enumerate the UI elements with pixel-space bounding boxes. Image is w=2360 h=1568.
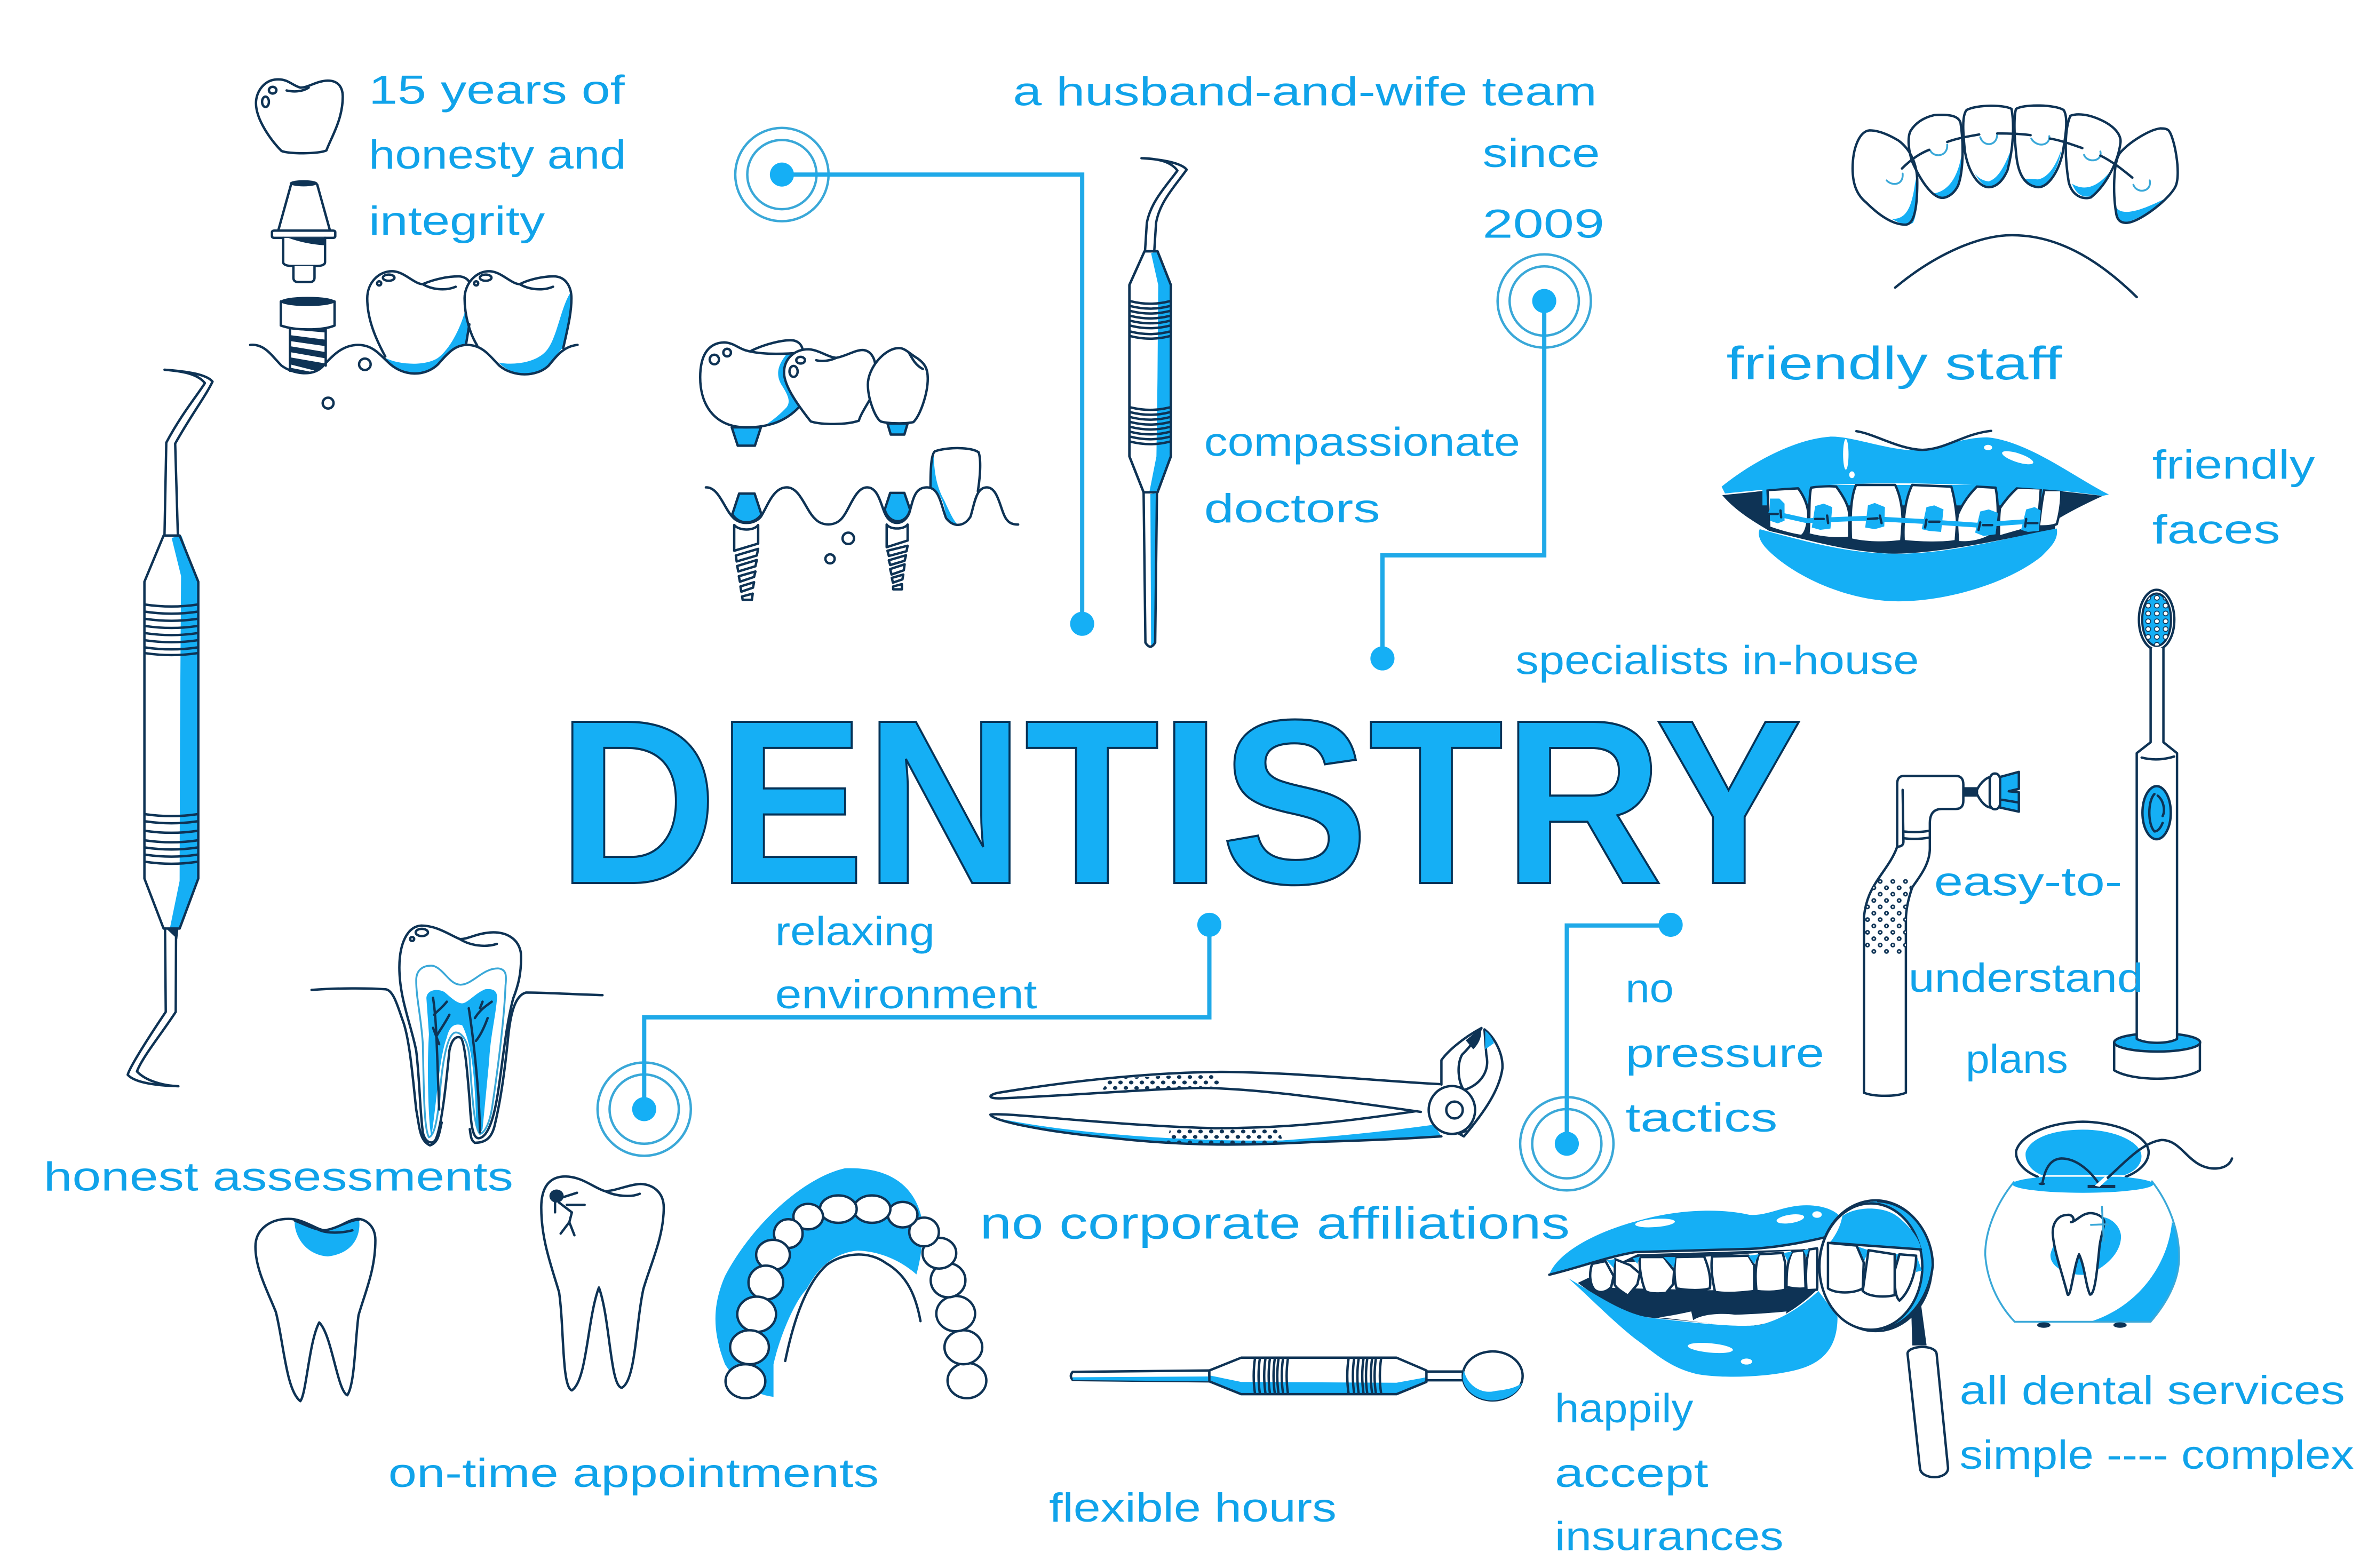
icon: denture arch — [716, 1168, 987, 1398]
text: happily accept insurances: insurances — [1555, 1514, 1784, 1559]
illustration: dental probe left — [128, 370, 212, 1086]
text: all dental services simple to complex: simple ---- complex — [1960, 1432, 2354, 1478]
text: friendly staff: friendly staff — [1726, 337, 2062, 389]
text: a husband-and-wife team since 2009 — [1013, 69, 1604, 247]
text: no pressure tactics — [1625, 966, 1824, 1141]
text: all dental services simple to complex — [1960, 1368, 2354, 1478]
icon: two molars in gum — [250, 271, 577, 409]
pointer: lower left target to dot — [598, 913, 1221, 1156]
text: specialists in-house: specialists in-house — [1516, 638, 1919, 683]
icon: implant posts — [734, 524, 908, 600]
text: happily accept insurances — [1555, 1386, 1784, 1559]
text: no pressure tactics: tactics — [1625, 1095, 1777, 1141]
illustration: mouth with dental mirror — [1550, 1200, 1948, 1477]
text: all dental services simple to complex: all dental services — [1960, 1368, 2345, 1413]
text: easy-to-understand plans — [1909, 859, 2143, 1082]
icon: gum line with abutments — [706, 488, 1018, 525]
icon: electric toothbrush — [2114, 590, 2200, 1079]
text: honest assessments: honest assessments — [44, 1154, 513, 1199]
text: no pressure tactics: pressure — [1625, 1031, 1824, 1076]
icon: tooth cross-section with roots — [312, 926, 602, 1145]
text: no pressure tactics: no — [1625, 966, 1674, 1012]
icon: implant screw — [281, 297, 335, 374]
illustration: handpiece and electric toothbrush — [1864, 590, 2200, 1096]
icon: forceps — [990, 1028, 1503, 1145]
pointer: top left target to dot — [735, 128, 1094, 636]
text: friendly faces — [2152, 442, 2315, 552]
text: compassionate doctors: compassionate — [1204, 420, 1520, 465]
text: happily accept insurances: accept — [1555, 1451, 1709, 1496]
illustration: dental probe top centre — [1130, 158, 1187, 647]
text: friendly faces: friendly — [2152, 442, 2315, 488]
text: 15 years of honesty and integrity — [369, 68, 626, 244]
illustration: braces teeth and lips — [1722, 106, 2178, 601]
icon: smiling lips with braces — [1722, 431, 2109, 601]
text: relaxing environment: environment — [775, 972, 1037, 1017]
illustration: root canal tooth and lower left teeth — [256, 926, 987, 1401]
icon: dental mirror — [1819, 1200, 1948, 1477]
text: a husband-and-wife team since 2009: since — [1482, 131, 1600, 176]
illustration: implant with crowns — [250, 79, 577, 409]
illustration: extraction forceps and dental mirror tool — [990, 1028, 1523, 1400]
text: compassionate doctors — [1204, 420, 1520, 531]
text: friendly faces: faces — [2152, 507, 2280, 552]
pointer: lower right target to dot — [1520, 913, 1683, 1190]
text: compassionate doctors: doctors — [1204, 486, 1380, 531]
text: easy-to-understand plans: easy-to- — [1934, 859, 2122, 904]
text: 15 years of honesty and integrity: honesty and — [369, 132, 626, 178]
illustration: implant bridge — [700, 340, 1018, 600]
text: a husband-and-wife team since 2009: 2009 — [1482, 202, 1604, 247]
icon: single crown — [256, 79, 343, 153]
text: relaxing environment: relaxing — [775, 909, 935, 954]
icon: bridge crowns — [700, 340, 928, 445]
icon: tooth with cavity — [541, 1176, 664, 1390]
text: easy-to-understand plans: understand — [1909, 956, 2143, 1001]
text: easy-to-understand plans: plans — [1966, 1037, 2068, 1082]
icon: teeth with wire — [1853, 106, 2178, 297]
text: no corporate affiliations: no corporate affiliations — [980, 1198, 1570, 1248]
text: relaxing environment — [775, 909, 1037, 1017]
text: 15 years of honesty and integrity: 15 years of — [369, 68, 625, 113]
icon: mouth mirror tool — [1071, 1351, 1523, 1400]
text: on-time appointments: on-time appointments — [388, 1451, 879, 1496]
text: happily accept insurances: happily — [1555, 1386, 1693, 1431]
text: a husband-and-wife team since 2009: a husband-and-wife team — [1013, 69, 1597, 114]
title: DENTISTRY: DENTISTRY — [558, 672, 1802, 933]
icon: tooth with filling — [256, 1219, 375, 1401]
text: 15 years of honesty and integrity: integrity — [369, 198, 545, 244]
icon: dental handpiece — [1864, 772, 2019, 1096]
icon: open mouth with teeth — [1550, 1205, 1841, 1377]
icon: abutment — [272, 180, 335, 282]
pointer: top right target to dot — [1370, 254, 1591, 671]
illustration: dental floss container — [1985, 1122, 2232, 1328]
text: flexible hours: flexible hours — [1049, 1485, 1337, 1531]
icon: front tooth — [931, 448, 980, 524]
